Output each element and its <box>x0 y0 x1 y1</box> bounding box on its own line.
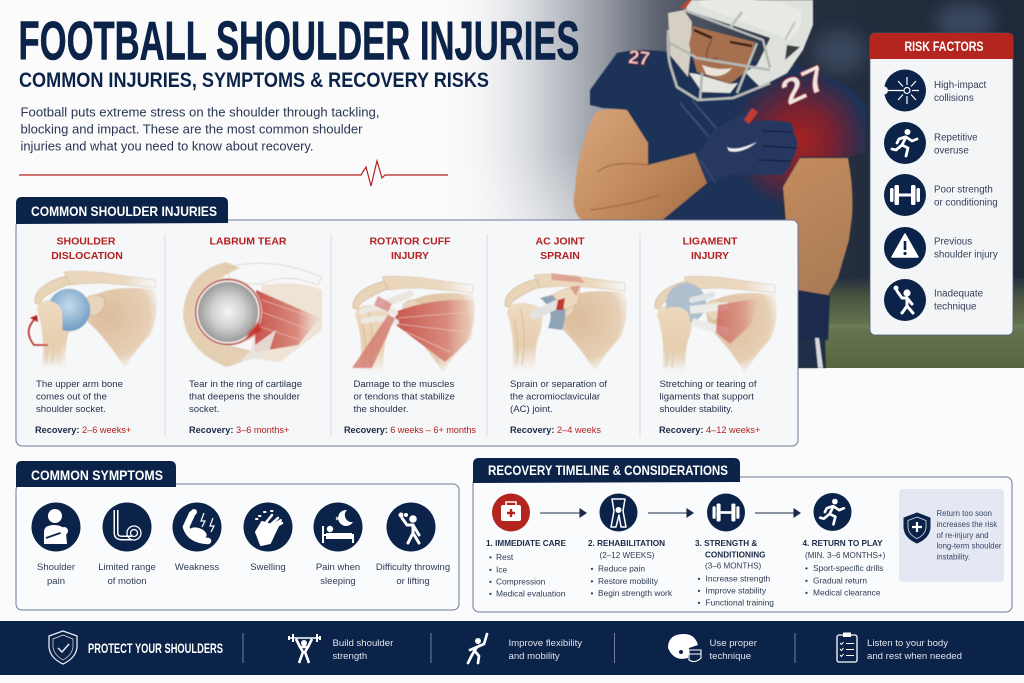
symptom: pain when sleeping <box>314 502 362 552</box>
description: Sprain or separation of <box>510 379 607 390</box>
section heading: recovery timeline <box>473 458 740 483</box>
icon: rehabilitation knee brace <box>600 494 638 532</box>
risk: inadequate technique <box>884 279 926 321</box>
intro text <box>20 106 380 154</box>
heading: INJURY <box>391 250 429 262</box>
icon: shield with check <box>49 631 77 664</box>
description <box>189 379 302 415</box>
panel: recovery timeline and considerations <box>473 458 1012 612</box>
icon: football helmet <box>668 634 701 662</box>
risk text: inadequate technique: technique <box>934 302 977 312</box>
step 1: immediate care: • <box>489 576 492 586</box>
footer banner: protect your shoulders <box>0 621 1024 675</box>
step 2: rehabilitation: • <box>590 564 594 574</box>
panel: common symptoms <box>16 461 459 610</box>
step 3: strength and conditioning: • <box>698 586 700 596</box>
symptom label: Pain when <box>316 562 360 573</box>
recovery time: Recovery: 2–6 weeks+ <box>35 425 131 435</box>
callout text: long-term shoulder <box>936 542 1002 550</box>
callout text: instability. <box>936 552 970 562</box>
arrow: step 1 to 2 <box>540 509 586 517</box>
description <box>660 379 757 415</box>
description: (AC) joint. <box>510 404 553 415</box>
injury: shoulder dislocation <box>29 236 157 435</box>
anatomy illustration: AC joint sprain <box>505 273 627 371</box>
step 4: return to play: (MIN. 3–6 MONTHS+) <box>805 551 886 560</box>
tip: build strength: Build shoulder <box>332 638 394 649</box>
heartbeat line <box>19 161 448 186</box>
hero photo: injured football player <box>440 0 1024 368</box>
step 4: return to play: Gradual return <box>813 576 867 586</box>
symptom label: or lifting <box>396 576 430 587</box>
recovery time: Recovery: 4–12 weeks+ <box>659 425 760 435</box>
injury: AC joint sprain <box>505 236 627 435</box>
description: Damage to the muscles <box>354 379 454 390</box>
heading: LIGAMENT <box>683 236 738 248</box>
risk text: previous injury: Previous <box>934 236 972 248</box>
callout: return too soon warning <box>899 489 1004 582</box>
arrow: step 3 to 4 <box>755 509 800 517</box>
description <box>354 379 455 415</box>
step 3: strength and conditioning: Improve stability <box>706 586 767 596</box>
description <box>36 379 123 415</box>
step 2: rehabilitation <box>588 539 673 598</box>
step 2: rehabilitation: • <box>590 588 594 598</box>
step 3: strength and conditioning <box>695 539 774 608</box>
icon: shield with cross <box>904 513 930 543</box>
step 2: rehabilitation: Restore mobility <box>598 576 659 586</box>
tip: listen to your body <box>867 638 962 662</box>
recovery time: Recovery: 3–6 months+ <box>189 425 289 435</box>
callout text: of re-injury and <box>936 531 989 540</box>
risk text: poor strength: or conditioning <box>934 198 998 208</box>
panel: common shoulder injuries <box>16 197 798 446</box>
description: the acromioclavicular <box>510 392 601 402</box>
step 3: strength and conditioning: (3–6 MONTHS) <box>705 562 762 570</box>
description: Tear in the ring of cartilage <box>189 379 302 390</box>
footer heading: PROTECT YOUR SHOULDERS <box>88 640 223 656</box>
risk text: previous injury <box>934 236 998 260</box>
description: ligaments that support <box>660 392 754 402</box>
step 1: immediate care: • <box>489 552 492 562</box>
risk: repetitive overuse <box>884 122 926 164</box>
intro text: blocking and impact. These are the most common shoulder <box>20 122 362 136</box>
tip: listen to your body: Listen to your body <box>867 638 948 649</box>
step 4: return to play: Medical clearance <box>813 588 881 598</box>
symptom label <box>316 562 360 587</box>
risk: poor strength <box>884 174 926 216</box>
symptom: difficulty throwing <box>386 502 436 552</box>
heading: SHOULDER <box>57 236 116 248</box>
risk: high-impact collisions <box>880 70 926 112</box>
tip: build strength: strength <box>332 651 367 662</box>
heading: INJURY <box>691 250 729 262</box>
symptom label: sleeping <box>320 576 356 587</box>
tip: technique <box>710 638 758 662</box>
symptom label: Weakness <box>175 562 219 573</box>
risk factors header: RISK FACTORS <box>904 38 984 54</box>
description: Stretching or tearing of <box>660 379 757 390</box>
step 2: rehabilitation: 2. REHABILITATION <box>588 539 665 548</box>
icon: weightlifter <box>289 634 320 663</box>
step 2: rehabilitation: Reduce pain <box>598 564 645 574</box>
description: the shoulder. <box>354 404 408 415</box>
callout text: increases the risk <box>936 520 997 529</box>
symptom label <box>37 562 75 587</box>
intro text: Football puts extreme stress on the shoulder through tackling, <box>20 106 380 120</box>
tip: listen to your body: and rest when needed <box>867 651 962 662</box>
risk text: poor strength <box>934 184 998 208</box>
icon: dumbbell <box>707 494 745 532</box>
icon: first aid kit <box>492 494 530 532</box>
anatomy illustration: labrum tear <box>183 262 322 367</box>
step 4: return to play: Sport-specific drills <box>813 563 883 573</box>
anatomy illustration: ligament <box>655 276 777 373</box>
player figure <box>574 0 867 368</box>
section heading: common shoulder injuries: COMMON SHOULDER INJURIES <box>31 203 217 219</box>
step 2: rehabilitation: • <box>590 576 594 586</box>
icon: clipboard checklist <box>837 632 857 662</box>
symptom label: Limited range <box>98 562 156 573</box>
risk text: repetitive overuse: overuse <box>934 146 969 156</box>
step 3: strength and conditioning: • <box>698 598 700 608</box>
symptom label: pain <box>47 576 65 587</box>
heading <box>51 236 123 262</box>
step 4: return to play: • <box>805 588 808 598</box>
description: socket. <box>189 404 219 415</box>
section heading: common symptoms: COMMON SYMPTOMS <box>31 467 163 483</box>
heading <box>369 236 451 262</box>
symptom label: Shoulder <box>37 562 75 573</box>
description: shoulder stability. <box>660 404 733 415</box>
player figure: 27 <box>627 47 651 70</box>
heading <box>535 236 585 262</box>
subtitle: COMMON INJURIES, SYMPTOMS & RECOVERY RISKS <box>19 68 489 92</box>
risk text: repetitive overuse <box>934 132 978 156</box>
icon: runner <box>814 493 852 531</box>
risk: previous injury <box>884 227 926 269</box>
description: shoulder socket. <box>36 404 106 415</box>
step 3: strength and conditioning: Increase strength <box>706 574 771 584</box>
recovery time: Recovery: 2–4 weeks <box>510 425 601 435</box>
symptom: swelling <box>244 502 292 552</box>
heading: DISLOCATION <box>51 250 123 262</box>
symptom label <box>98 562 156 587</box>
risk text: high-impact collisions: collisions <box>934 93 974 104</box>
step 1: immediate care: 1. IMMEDIATE CARE <box>486 539 566 548</box>
symptom label: of motion <box>107 576 147 587</box>
callout text: Return too soon <box>936 509 992 518</box>
step 4: return to play <box>802 539 886 598</box>
callout text <box>936 509 1002 562</box>
step 4: return to play: 4. RETURN TO PLAY <box>802 539 883 548</box>
intro text: injuries and what you need to know about recovery. <box>20 140 314 154</box>
injury: ligament injury <box>655 236 777 435</box>
description: The upper arm bone <box>36 379 123 390</box>
injury: rotator cuff <box>344 236 476 435</box>
heading: LABRUM TEAR <box>210 236 287 248</box>
player figure: 27 <box>774 56 833 113</box>
step 2: rehabilitation: Begin strength work <box>598 588 673 598</box>
symptom: limited range <box>102 502 152 552</box>
anatomy illustration: rotator cuff <box>352 276 475 373</box>
description: or tendons that stabilize <box>354 392 455 402</box>
risk text: repetitive overuse: Repetitive <box>934 132 978 144</box>
arrow: step 2 to 3 <box>648 509 693 517</box>
description: comes out of the <box>36 392 107 402</box>
symptom label <box>376 562 450 587</box>
symptom label: Difficulty throwing <box>376 562 450 573</box>
icon: stretching figure <box>468 634 487 663</box>
step 1: immediate care: Compression <box>496 576 546 586</box>
tip: flexibility: and mobility <box>508 651 560 662</box>
tip: flexibility: Improve flexibility <box>508 638 582 649</box>
heading: AC JOINT <box>535 236 585 248</box>
step 3: strength and conditioning: 3. STRENGTH & <box>695 539 757 548</box>
step 1: immediate care: Ice <box>496 564 508 574</box>
anatomy illustration: dislocated shoulder <box>29 271 157 368</box>
section heading: common symptoms <box>16 461 176 487</box>
risk text: high-impact collisions: High-impact <box>934 80 987 91</box>
symptom: shoulder pain <box>32 502 80 552</box>
section heading: recovery timeline: RECOVERY TIMELINE & CONSIDERATIONS <box>488 462 728 478</box>
tip: build strength <box>332 638 394 662</box>
risk text: inadequate technique: Inadequate <box>934 288 984 300</box>
step 3: strength and conditioning: Functional training <box>706 598 774 608</box>
section heading: common shoulder injuries <box>16 197 228 224</box>
step 1: immediate care: • <box>489 588 492 598</box>
risk factors header <box>870 33 1013 59</box>
recovery time: Recovery: 6 weeks – 6+ months <box>344 425 476 435</box>
heading: SPRAIN <box>540 250 580 262</box>
step 4: return to play: • <box>805 576 808 586</box>
title: FOOTBALL SHOULDER INJURIES <box>18 10 580 72</box>
symptom: weakness <box>172 502 222 552</box>
risk text: inadequate technique <box>934 288 984 312</box>
step 1: immediate care: Rest <box>496 552 514 562</box>
symptom label: Swelling <box>250 562 286 573</box>
tip: technique: Use proper <box>710 638 758 649</box>
description: that deepens the shoulder <box>189 392 301 402</box>
step 1: immediate care <box>486 539 566 598</box>
step 1: immediate care: • <box>489 564 492 574</box>
panel: risk factors <box>870 33 1013 335</box>
description <box>510 379 607 415</box>
tip: technique: technique <box>710 651 751 662</box>
step 3: strength and conditioning: • <box>698 574 700 584</box>
step 4: return to play: • <box>805 563 808 573</box>
risk text: high-impact collisions <box>934 80 987 104</box>
heading <box>683 236 738 262</box>
risk text: poor strength: Poor strength <box>934 184 993 196</box>
step 2: rehabilitation: (2–12 WEEKS) <box>600 551 655 560</box>
injury: labrum tear <box>183 236 322 435</box>
step 3: strength and conditioning: CONDITIONING <box>705 550 766 560</box>
heading: ROTATOR CUFF <box>369 236 451 248</box>
risk text: previous injury: shoulder injury <box>934 250 998 260</box>
step 1: immediate care: Medical evaluation <box>496 588 566 598</box>
tip: flexibility <box>508 638 582 662</box>
